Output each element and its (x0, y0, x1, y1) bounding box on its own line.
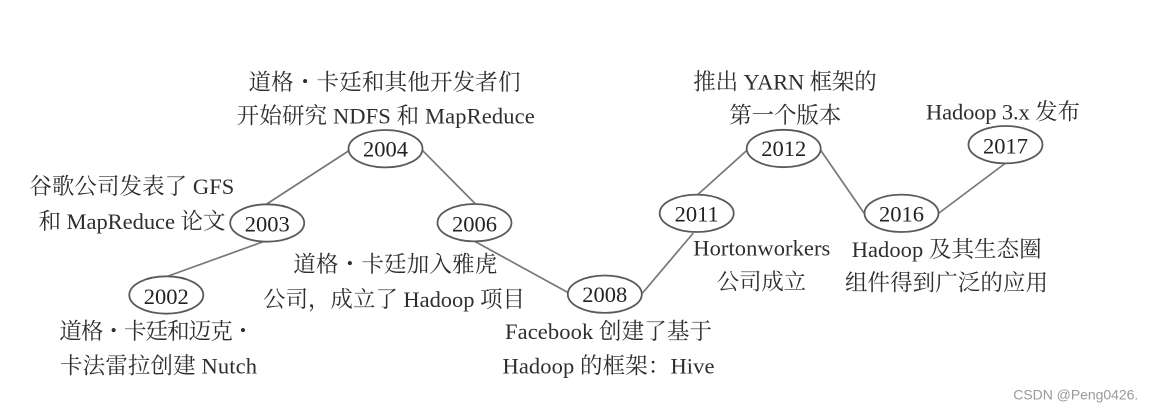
event: 2017 (926, 100, 1080, 163)
event: 2016: 2016 (879, 202, 924, 227)
event: 2011: 2011 (675, 202, 719, 227)
event: 2006: 道格・卡廷加入雅虎 (293, 252, 497, 277)
event: 2012: 第一个版本 (729, 103, 841, 128)
event: 2003: 2003 (245, 212, 290, 236)
event: 2016 (845, 195, 1048, 296)
event: 2004: 道格・卡廷和其他开发者们 (248, 70, 520, 95)
event: 2004: 开始研究 NDFS 和 MapReduce (237, 104, 535, 128)
event: 2004 (237, 70, 535, 167)
event: 2016: 组件得到广泛的应用 (845, 270, 1048, 296)
event: 2002: 卡法雷拉创建 Nutch (60, 354, 257, 378)
event: 2004: 2004 (363, 136, 408, 161)
event: 2008: Hadoop 的框架：Hive (502, 354, 714, 378)
timeline connector line (168, 150, 1005, 293)
event: 2012 (693, 70, 877, 167)
event: 2003: 谷歌公司发表了 GFS (29, 174, 234, 199)
event: 2017: 2017 (983, 133, 1028, 158)
event: 2003: 和 MapReduce 论文 (38, 209, 226, 234)
event: 2016: Hadoop 及其生态圈 (852, 237, 1042, 262)
event: 2002: 2002 (144, 284, 189, 309)
event: 2008 (502, 276, 714, 378)
event: 2003 (29, 174, 304, 242)
event: 2011 (660, 195, 830, 294)
event: 2017: Hadoop 3.x 发布 (926, 100, 1080, 124)
event: 2002: 道格・卡廷和迈克・ (59, 319, 254, 344)
event: 2008: Facebook 创建了基于 (505, 319, 712, 344)
event: 2002 (59, 276, 257, 378)
event: 2012: 推出 YARN 框架的 (693, 70, 877, 94)
event: 2011: Hortonworkers (693, 236, 830, 260)
watermark: CSDN @Peng0426. (1013, 387, 1138, 403)
event: 2006: 2006 (452, 212, 497, 236)
event: 2006 (263, 204, 525, 313)
event: 2012: 2012 (761, 136, 806, 161)
event: 2006: 公司，成立了 Hadoop 项目 (263, 287, 525, 313)
event: 2011: 公司成立 (717, 270, 806, 294)
event: 2008: 2008 (582, 282, 627, 307)
